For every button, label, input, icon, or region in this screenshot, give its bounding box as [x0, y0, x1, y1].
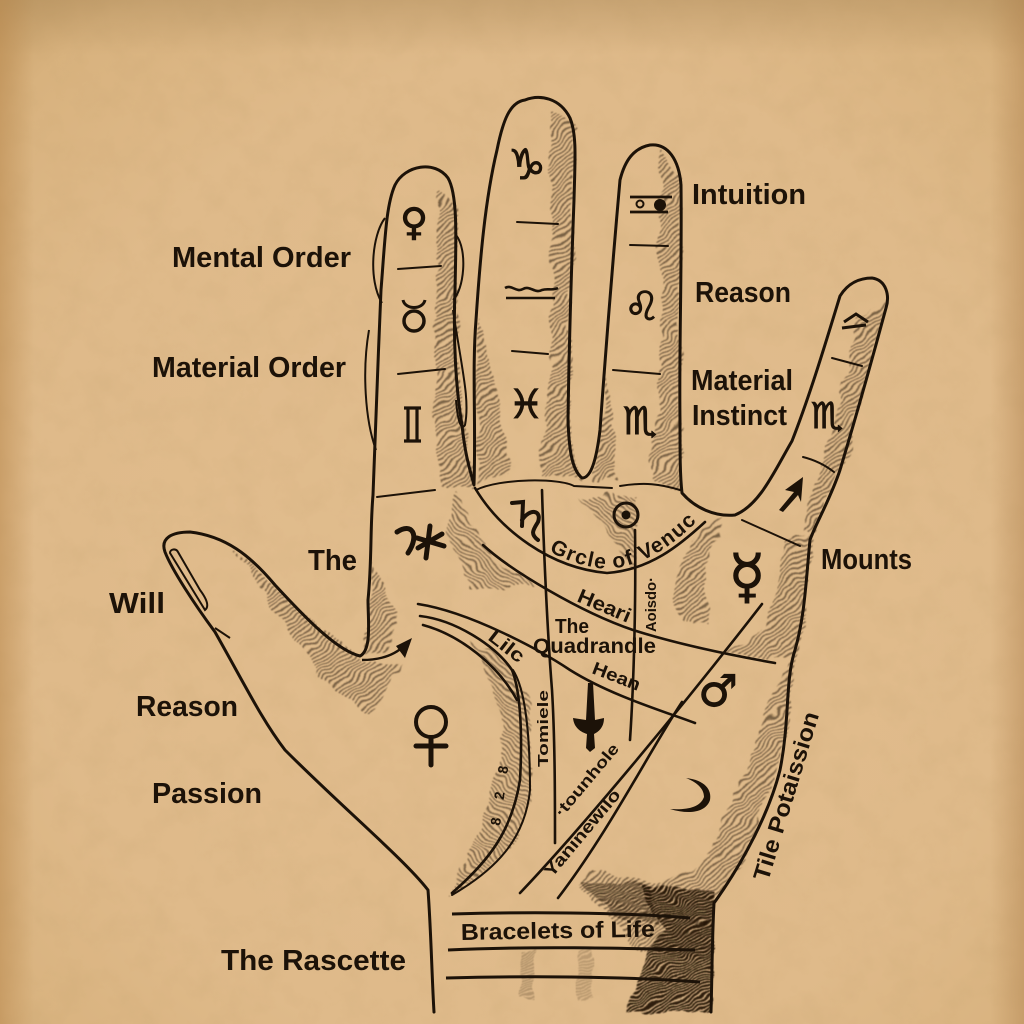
- label: bracelets of life: Bracelets of Life: [461, 916, 655, 945]
- icon: moon: [670, 778, 710, 812]
- label: will: Will: [109, 588, 165, 620]
- label: percussion: Tile Potaission: [748, 709, 824, 883]
- label: mounts: Mounts: [821, 544, 912, 576]
- label: the quadrangle: Quadrandle: [533, 635, 656, 658]
- label: reason upper: Reason: [695, 277, 791, 309]
- icon: jupiter: [397, 526, 444, 558]
- life lines: [420, 616, 521, 893]
- label: material: Material: [691, 365, 793, 397]
- index finger loops: [365, 218, 467, 450]
- label: mental order: Mental Order: [172, 242, 351, 274]
- label: diagonal tounhole: ·tounhole: [552, 741, 623, 821]
- finger creases: [377, 222, 862, 546]
- icon: capricorn: ♑︎: [508, 140, 546, 189]
- icon: virgo: ♏︎: [623, 399, 657, 443]
- hatched shading of the hand: [232, 110, 885, 1012]
- icon: pisces: ♓︎: [508, 382, 544, 428]
- bracelets of life: [446, 913, 700, 982]
- label: life: Lilc: [484, 626, 529, 668]
- label: the quadrangle: [533, 616, 656, 658]
- label: small life text: 8 2 8: [487, 765, 511, 826]
- Saturn line: [542, 490, 555, 843]
- icon: sun: [614, 503, 638, 527]
- icon: gemini: [404, 408, 421, 441]
- icon: large venus: [416, 707, 446, 765]
- palm labels: [484, 516, 695, 881]
- icon: leo: ♌︎: [624, 284, 660, 330]
- icon: mercury: ☿︎: [729, 542, 765, 612]
- palm lines: [418, 488, 775, 898]
- head line: [418, 604, 695, 723]
- label: passion: Passion: [152, 778, 262, 810]
- label: girdle of venus: Grcle of Venuc: [552, 516, 695, 568]
- label: the: The: [308, 545, 357, 577]
- label: the rascette: The Rascette: [221, 945, 406, 977]
- heart line: [483, 545, 775, 663]
- label: instinct: Instinct: [692, 400, 787, 432]
- label: material order: Material Order: [152, 352, 346, 384]
- label: the quadrangle: The: [555, 616, 589, 638]
- icon: scorpio: ♏︎: [811, 396, 843, 437]
- hand outline: [164, 97, 887, 1012]
- finger arrow: [779, 477, 803, 512]
- label: vertical apisdo: Aoisdo·: [643, 577, 660, 632]
- icon: cancer: [630, 197, 672, 212]
- label: heart: Heari: [574, 585, 634, 627]
- outside labels: [109, 179, 912, 977]
- label: vertical tomiele: Tomiele: [535, 690, 552, 767]
- icon: dagger: [573, 683, 604, 752]
- circle of Venus line: [475, 488, 705, 573]
- icon: mars: ♂︎: [698, 666, 738, 717]
- icon: saturn: [512, 502, 539, 540]
- icon: libra: [842, 314, 868, 328]
- label: reason lower: Reason: [136, 691, 238, 723]
- mount of thumb arrow: [362, 645, 405, 660]
- zodiac symbols: [397, 140, 868, 812]
- label: head: Hean: [590, 658, 643, 695]
- icon: venus on index tip: ♀︎: [400, 200, 428, 244]
- Sun line: [630, 530, 635, 740]
- fate lines: [520, 604, 762, 893]
- label: diagonal yaninewilo: Yaninewilo: [541, 786, 624, 881]
- icon: aquarius: [505, 287, 558, 298]
- thumb nail: [170, 549, 230, 638]
- icon: taurus: [403, 300, 425, 331]
- label: intuition: Intuition: [692, 179, 806, 211]
